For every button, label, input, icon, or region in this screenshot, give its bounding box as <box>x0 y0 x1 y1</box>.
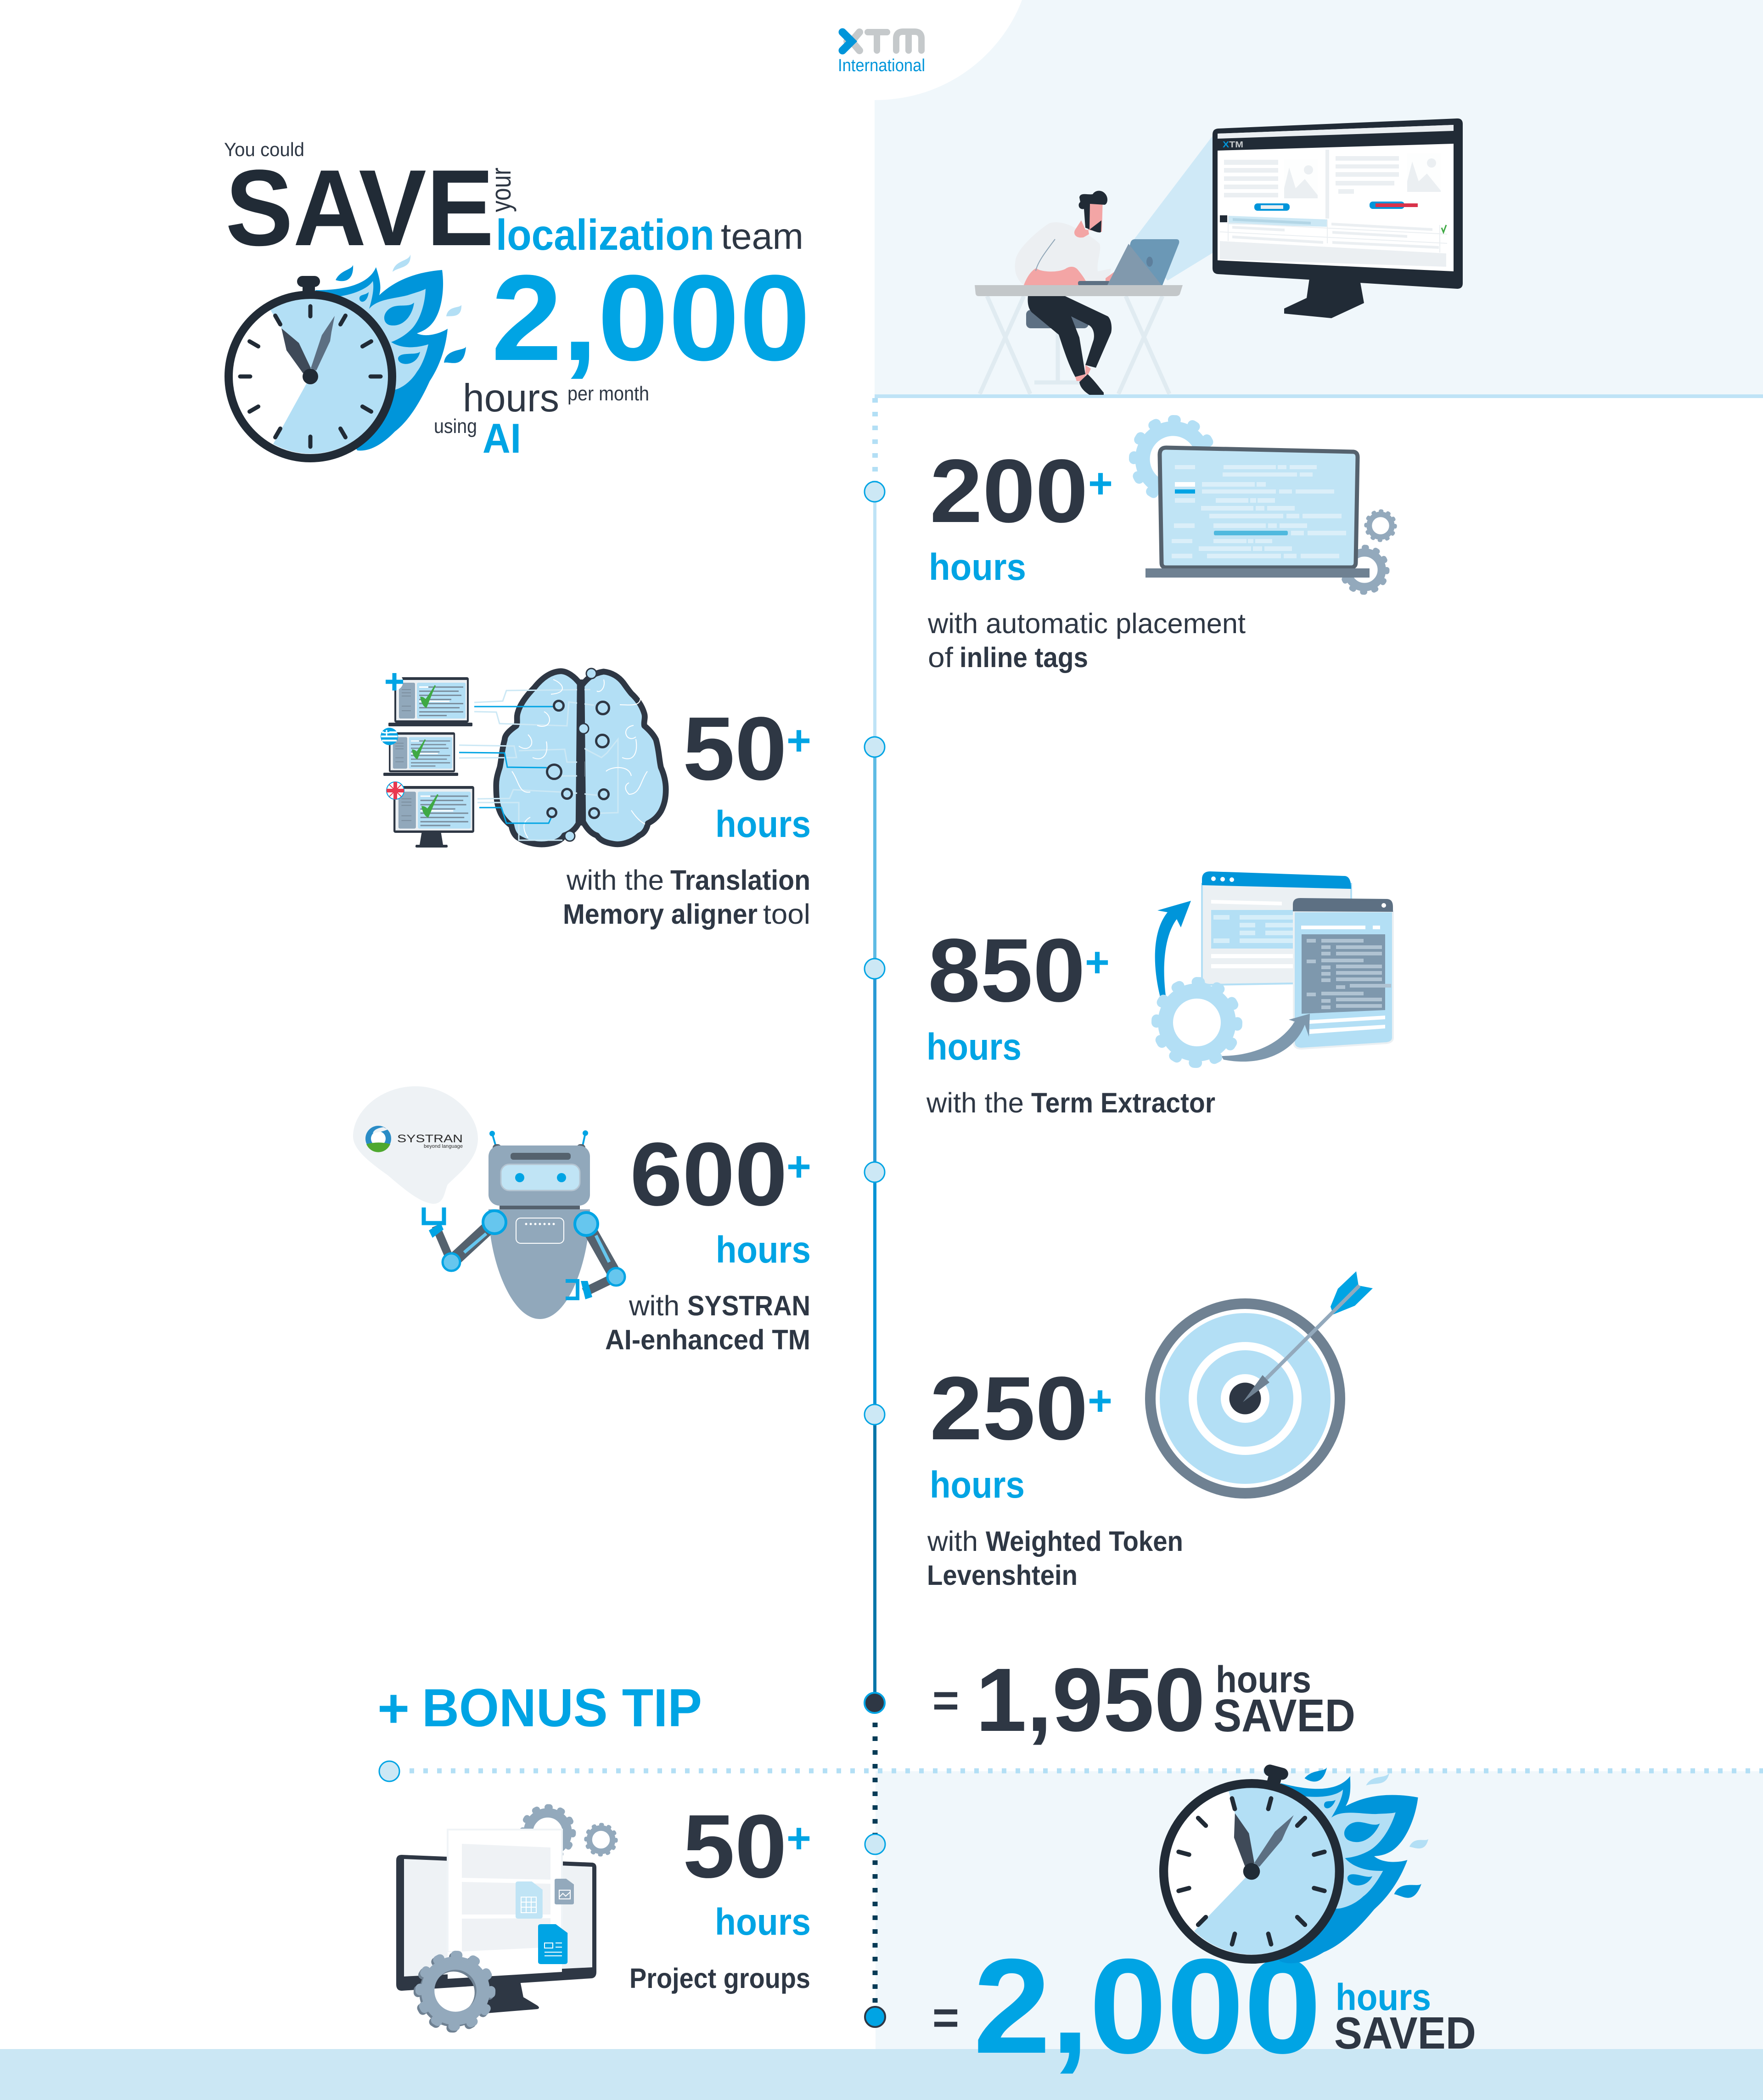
illustration: brain and screens <box>381 668 666 848</box>
logo: XTM International <box>838 32 925 75</box>
horizontal divider under header illustration <box>875 394 1763 398</box>
headline block: your <box>486 168 517 212</box>
dotted end <box>872 1723 878 2007</box>
totals: 1,950 hours saved: 1,950 <box>976 1650 1205 1750</box>
flags <box>381 673 404 799</box>
front window <box>1294 911 1393 1049</box>
section: 850+ hours: Term Extractor <box>1031 1087 1215 1118</box>
section: 600+ hours <box>605 1124 811 1355</box>
body <box>488 1209 590 1319</box>
neck <box>500 1206 580 1209</box>
section: 50+ hours TM aligner: + <box>786 717 811 764</box>
section: 50+ hours project groups: Project groups <box>629 1963 810 1994</box>
screens <box>394 677 469 723</box>
headline block: You could <box>224 139 304 160</box>
totals: 1,950 hours saved <box>932 1650 1355 1750</box>
stool <box>1026 310 1089 328</box>
panel: bottom pale background <box>876 1771 1763 2049</box>
icon: stopwatch with flames (bottom) <box>1144 1722 1447 1999</box>
illustration: monitor with documents and gears <box>396 1807 616 2028</box>
icon: stopwatch with flames <box>229 254 466 458</box>
person <box>1015 191 1116 395</box>
section: 200+ hours: inline tags <box>960 642 1088 673</box>
section: 50+ hours TM aligner: 50 <box>683 698 787 799</box>
gear <box>1157 982 1237 1063</box>
swirl mark <box>365 1126 391 1152</box>
totals: 2,000 hours saved: hours <box>1336 1976 1431 2018</box>
section: 250+ hours: + <box>1088 1377 1112 1424</box>
section: 200+ hours: + <box>1088 460 1113 507</box>
section: 600+ hours: hours <box>716 1229 811 1271</box>
headline block: team <box>721 216 803 257</box>
section: 250+ hours: hours <box>930 1464 1025 1506</box>
section: 50+ hours TM aligner <box>563 698 811 930</box>
antennae <box>492 1133 585 1148</box>
left arm <box>424 1207 506 1271</box>
speech bubble: SYSTRAN logo: beyond language <box>424 1144 463 1149</box>
headline block: SAVE <box>225 147 494 269</box>
totals: 2,000 hours saved: SAVED <box>1334 2008 1476 2058</box>
speech bubble: SYSTRAN logo <box>353 1086 478 1204</box>
section: 50+ hours TM aligner: Translation <box>670 865 810 896</box>
timeline <box>865 398 885 2027</box>
section: 600+ hours: 600 <box>630 1124 787 1224</box>
section: 50+ hours TM aligner: tool <box>763 898 810 930</box>
section: 250+ hours: Levenshtein <box>927 1560 1078 1591</box>
panel: bottom band <box>0 2049 1763 2100</box>
file icons <box>516 1879 574 1964</box>
dashed start <box>872 398 878 482</box>
headline block: 2,000 <box>491 250 810 386</box>
section: 850+ hours: with the <box>926 1087 1024 1118</box>
headline block: using <box>434 415 477 438</box>
section: 200+ hours <box>927 441 1246 673</box>
section: 600+ hours: + <box>786 1143 811 1190</box>
section: 250+ hours: with <box>927 1526 978 1557</box>
light beam <box>1134 136 1213 281</box>
illustration: person at desk with monitor <box>975 118 1463 395</box>
totals: 2,000 hours saved: = <box>932 1992 959 2044</box>
illustration: term extractor <box>1155 871 1393 1063</box>
totals: 2,000 hours saved <box>932 1931 1476 2082</box>
section: 50+ hours project groups <box>629 1796 811 1994</box>
icon: target and arrow <box>1145 1271 1373 1499</box>
monitor: XTM <box>1223 140 1243 149</box>
totals: 1,950 hours saved: = <box>932 1675 959 1726</box>
head <box>488 1145 590 1206</box>
section: 850+ hours: hours <box>926 1026 1022 1068</box>
section: 50+ hours project groups: 50 <box>683 1796 787 1897</box>
section: 50+ hours project groups: + <box>786 1815 811 1862</box>
illustration: robot <box>424 1130 625 1319</box>
heading: bonus tip: BONUS TIP <box>422 1678 702 1738</box>
panel: top pale background <box>875 0 1763 395</box>
logo: XTM International: International <box>838 56 925 75</box>
section: 250+ hours: Weighted Token <box>986 1526 1183 1557</box>
section: 50+ hours project groups: hours <box>715 1901 811 1943</box>
desk <box>975 285 1183 296</box>
section: 600+ hours: AI-enhanced TM <box>605 1324 810 1355</box>
chest panel <box>516 1218 564 1243</box>
headline block: per month <box>567 382 649 405</box>
connector lines <box>459 690 618 840</box>
section: 850+ hours: 850 <box>928 920 1085 1021</box>
speech bubble: SYSTRAN logo: SYSTRAN <box>397 1133 463 1145</box>
laptop <box>1078 239 1179 286</box>
section: 250+ hours <box>927 1358 1183 1591</box>
illustration: laptop with gears <box>1134 420 1395 592</box>
timeline nodes <box>865 482 885 1854</box>
headline block: localization <box>496 211 714 259</box>
totals: 1,950 hours saved: hours <box>1216 1659 1311 1701</box>
section: 600+ hours: SYSTRAN <box>687 1290 810 1321</box>
back window <box>1202 884 1351 985</box>
section: 200+ hours: 200 <box>930 441 1088 541</box>
headline block <box>224 139 810 462</box>
section: 50+ hours TM aligner: with the <box>566 865 664 896</box>
section: 200+ hours: hours <box>929 546 1026 588</box>
section: 850+ hours <box>926 920 1215 1118</box>
section: 200+ hours: with automatic placement <box>927 608 1246 639</box>
bonus dotted divider <box>379 1761 1763 1781</box>
section: 200+ hours: of <box>928 642 954 673</box>
section: 850+ hours: + <box>1085 939 1110 986</box>
section: 250+ hours: 250 <box>930 1358 1088 1459</box>
arrow: gear to glossary <box>1221 1014 1310 1061</box>
headline block: AI <box>483 416 521 462</box>
section: 50+ hours TM aligner: Memory aligner <box>563 898 758 930</box>
totals: 2,000 hours saved: 2,000 <box>973 1931 1321 2082</box>
headline block: hours <box>463 376 559 420</box>
heading: bonus tip: + <box>377 1678 410 1739</box>
totals: 1,950 hours saved: SAVED <box>1213 1690 1355 1741</box>
monitor <box>1213 118 1463 318</box>
section: 50+ hours TM aligner: hours <box>715 803 811 845</box>
brain <box>496 671 666 844</box>
brain nodes <box>547 668 609 841</box>
arrow: up to window <box>1155 901 1191 1002</box>
right arm <box>566 1213 625 1299</box>
section: 600+ hours: with <box>629 1290 679 1321</box>
